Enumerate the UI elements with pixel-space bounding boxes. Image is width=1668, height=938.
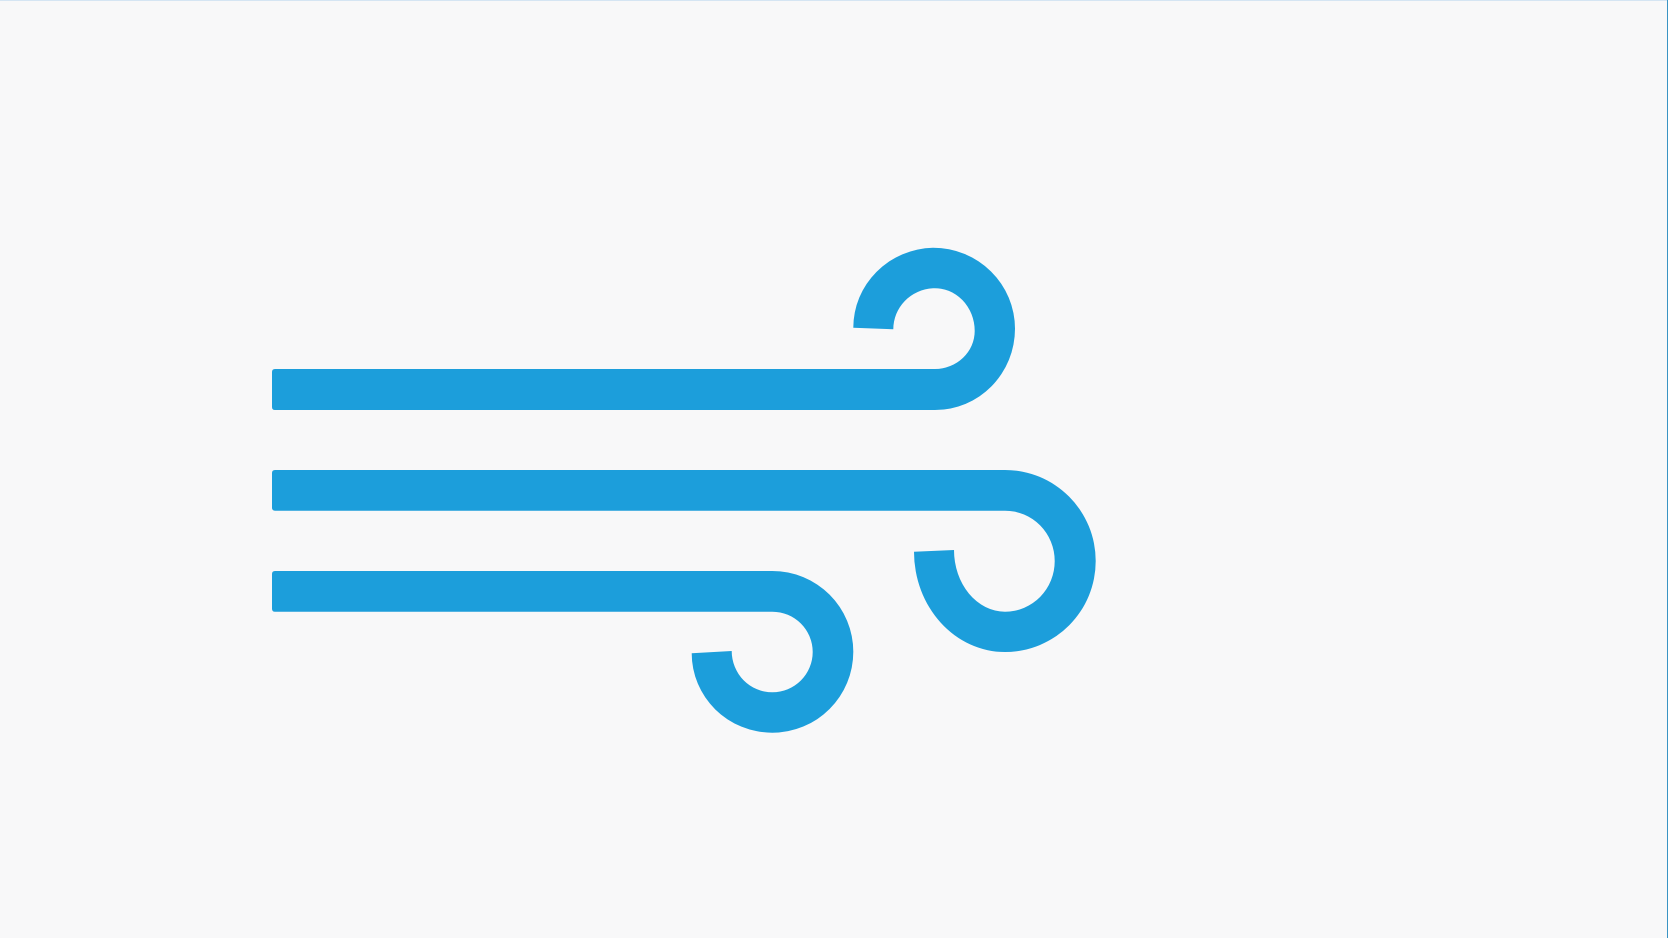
icon: top wind gust with upward curl xyxy=(272,248,1015,410)
icon: bottom wind gust with downward curl xyxy=(272,571,853,733)
icon: middle wind gust with downward curl xyxy=(272,470,1096,652)
